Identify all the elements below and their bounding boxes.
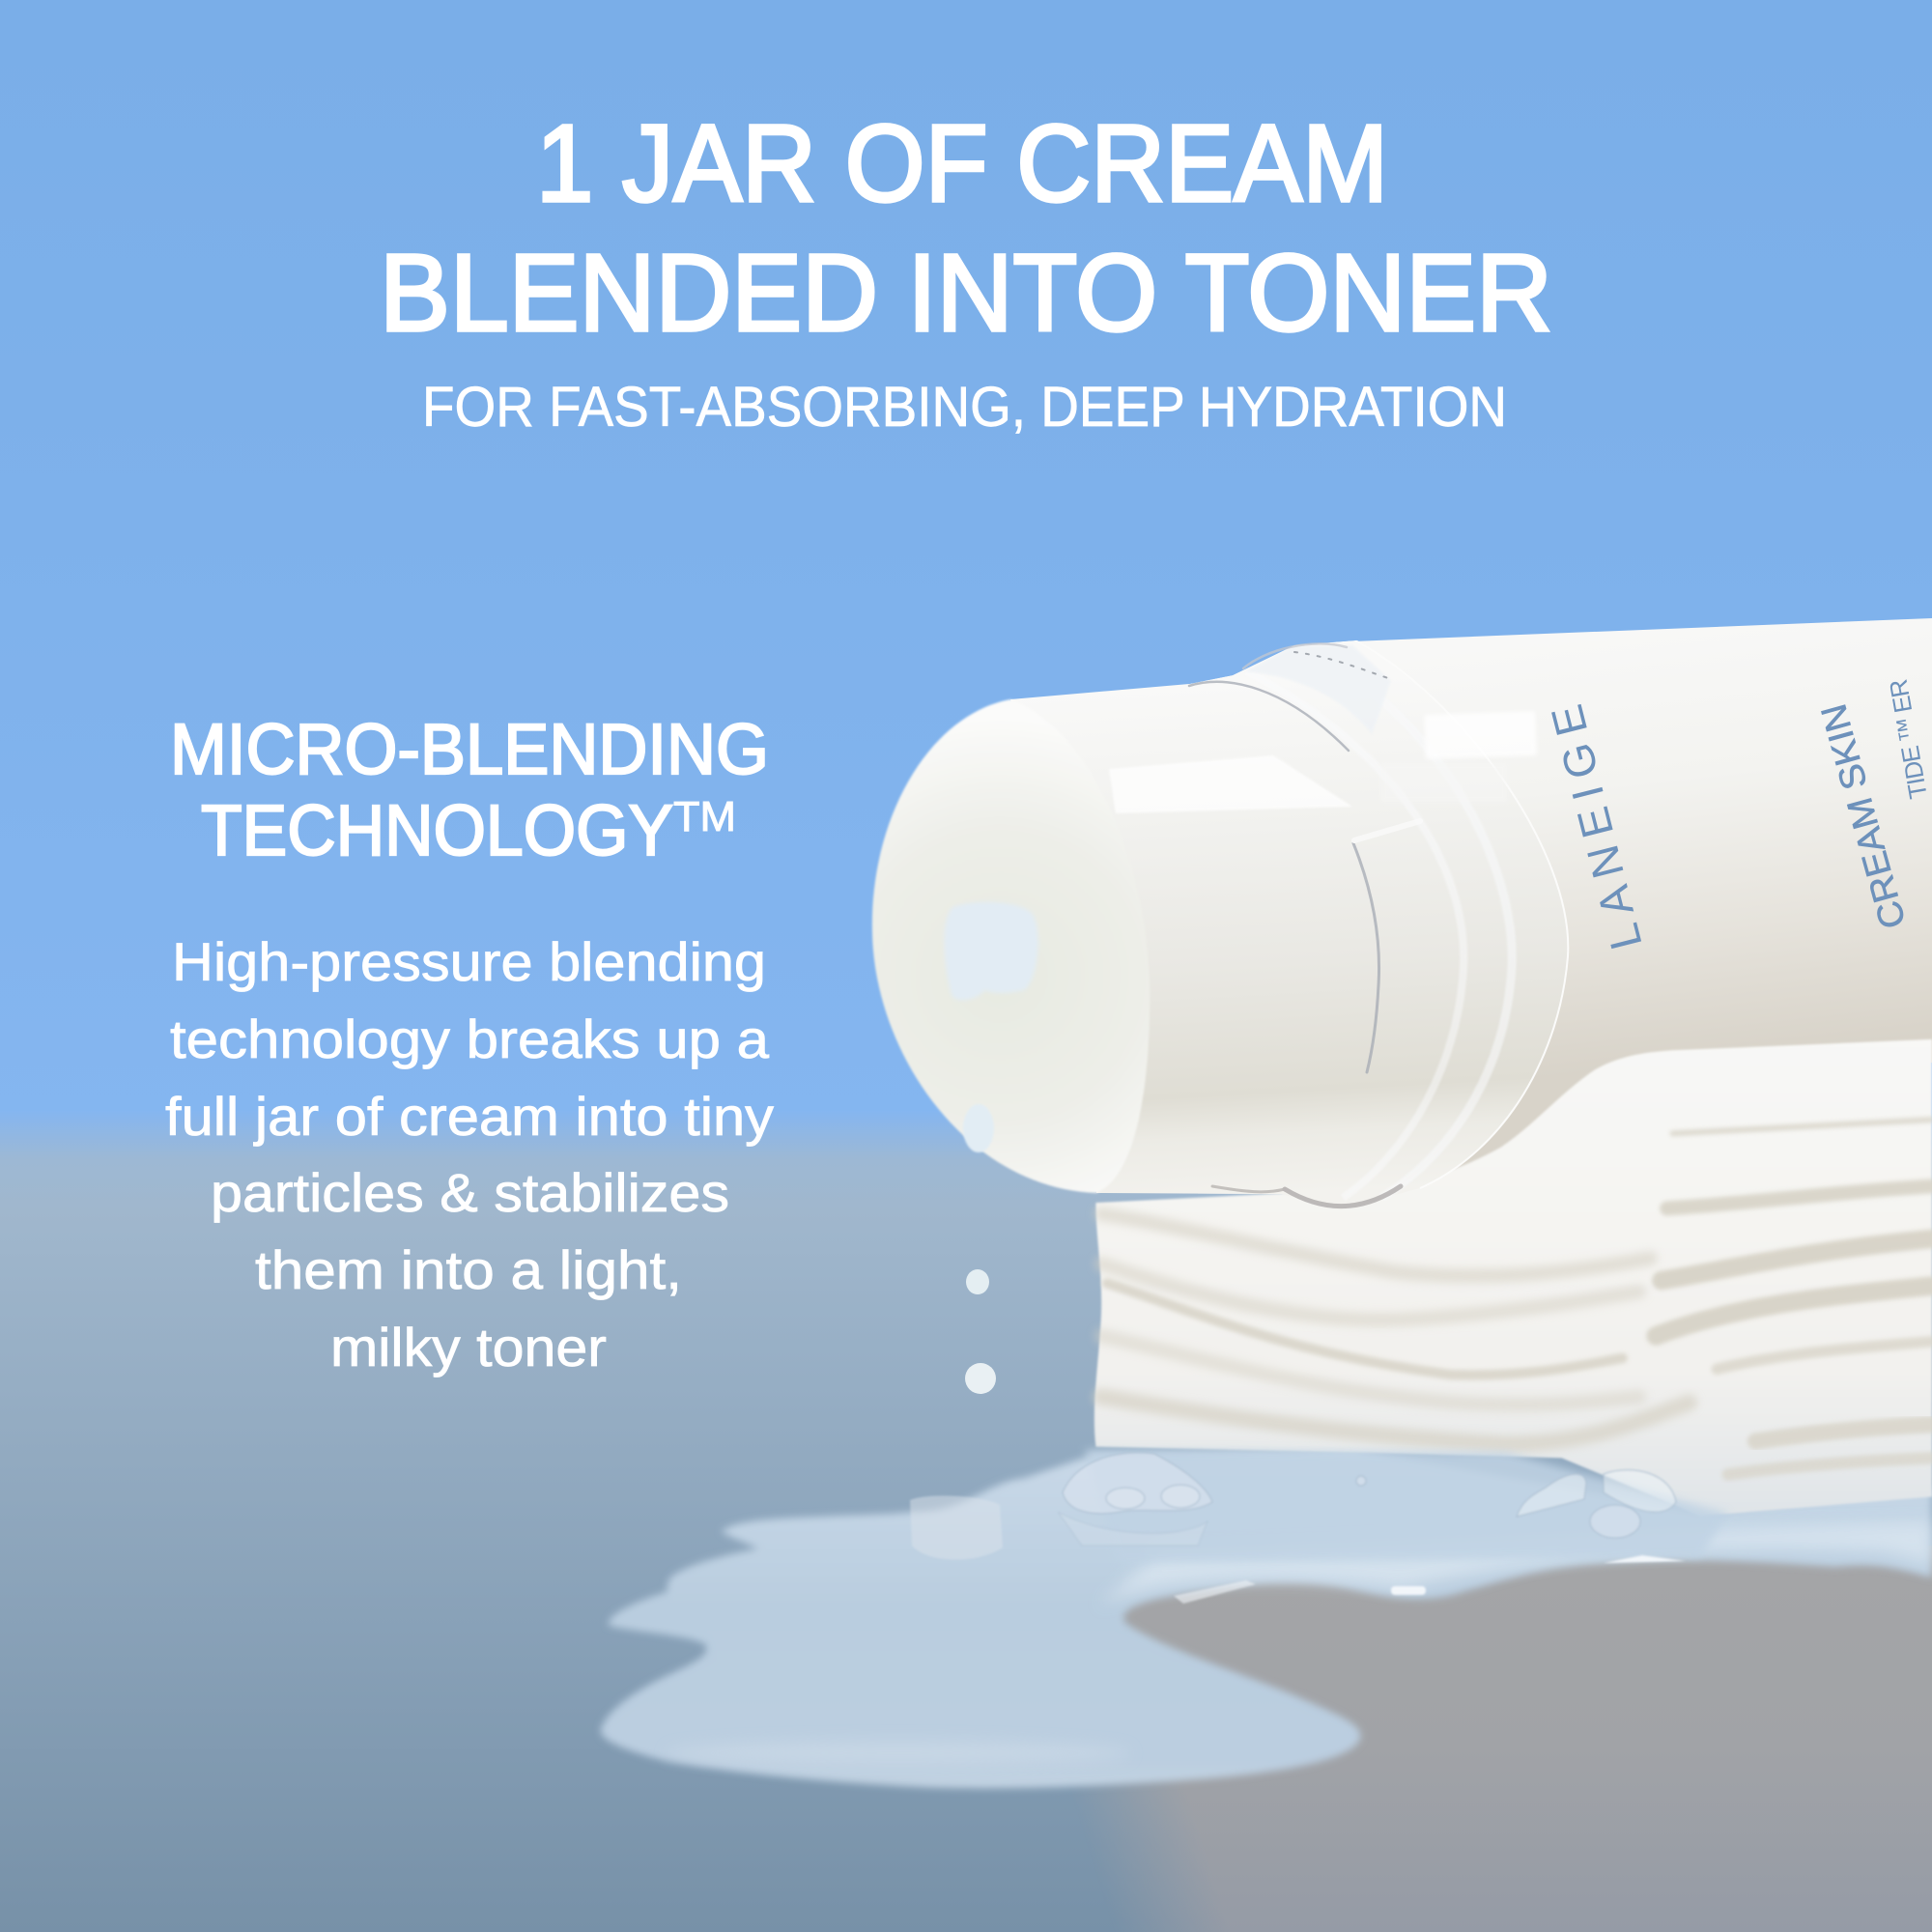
body copy: technology breaks up a bbox=[170, 1009, 770, 1069]
stack of cotton pads bbox=[1085, 1039, 1932, 1563]
section heading: TECHNOLOGY bbox=[201, 790, 673, 870]
cap front face bbox=[872, 699, 1150, 1193]
body copy: High-pressure blending bbox=[172, 931, 766, 992]
nozzle cream blob bbox=[945, 902, 1038, 1000]
title bbox=[380, 102, 1552, 354]
title: 1 JAR OF CREAM bbox=[536, 102, 1388, 224]
label small print: TIDE ™ ER bbox=[1884, 677, 1932, 801]
body copy: particles & stabilizes bbox=[211, 1162, 729, 1223]
product name: CREAM SKIN: CREAM SKIN bbox=[1813, 700, 1914, 933]
body copy bbox=[165, 931, 774, 1378]
subtitle: FOR FAST-ABSORBING, DEEP HYDRATION bbox=[422, 376, 1507, 439]
cap highlight band bbox=[1109, 755, 1352, 813]
background: reflective floor bbox=[0, 1111, 1932, 1932]
highlights on the spill edge bbox=[1174, 1555, 1686, 1604]
section heading: TM bbox=[673, 793, 736, 840]
background: blue sky wall bbox=[0, 0, 1932, 1159]
drop on cap bbox=[963, 1104, 994, 1152]
milky toner spill bbox=[601, 1449, 1932, 1788]
body copy: full jar of cream into tiny bbox=[165, 1086, 774, 1147]
falling milk drops bbox=[965, 1269, 996, 1394]
translucent collar bbox=[1189, 640, 1568, 1209]
brand label: LANEIGE: LANEIGE bbox=[1541, 700, 1652, 954]
collar ring lines bbox=[1189, 643, 1420, 1207]
product bottle bbox=[872, 640, 1932, 1209]
section heading: MICRO-BLENDING bbox=[170, 709, 769, 789]
title: BLENDED INTO TONER bbox=[380, 232, 1552, 354]
grey reflection on floor bbox=[1101, 1557, 1932, 1932]
bottle body bbox=[1256, 618, 1932, 1198]
bubbles on the spill bbox=[910, 1453, 1676, 1560]
body copy: milky toner bbox=[330, 1317, 607, 1378]
body copy: them into a light, bbox=[255, 1239, 682, 1300]
cap side bbox=[1010, 684, 1378, 1194]
section heading bbox=[170, 709, 769, 870]
